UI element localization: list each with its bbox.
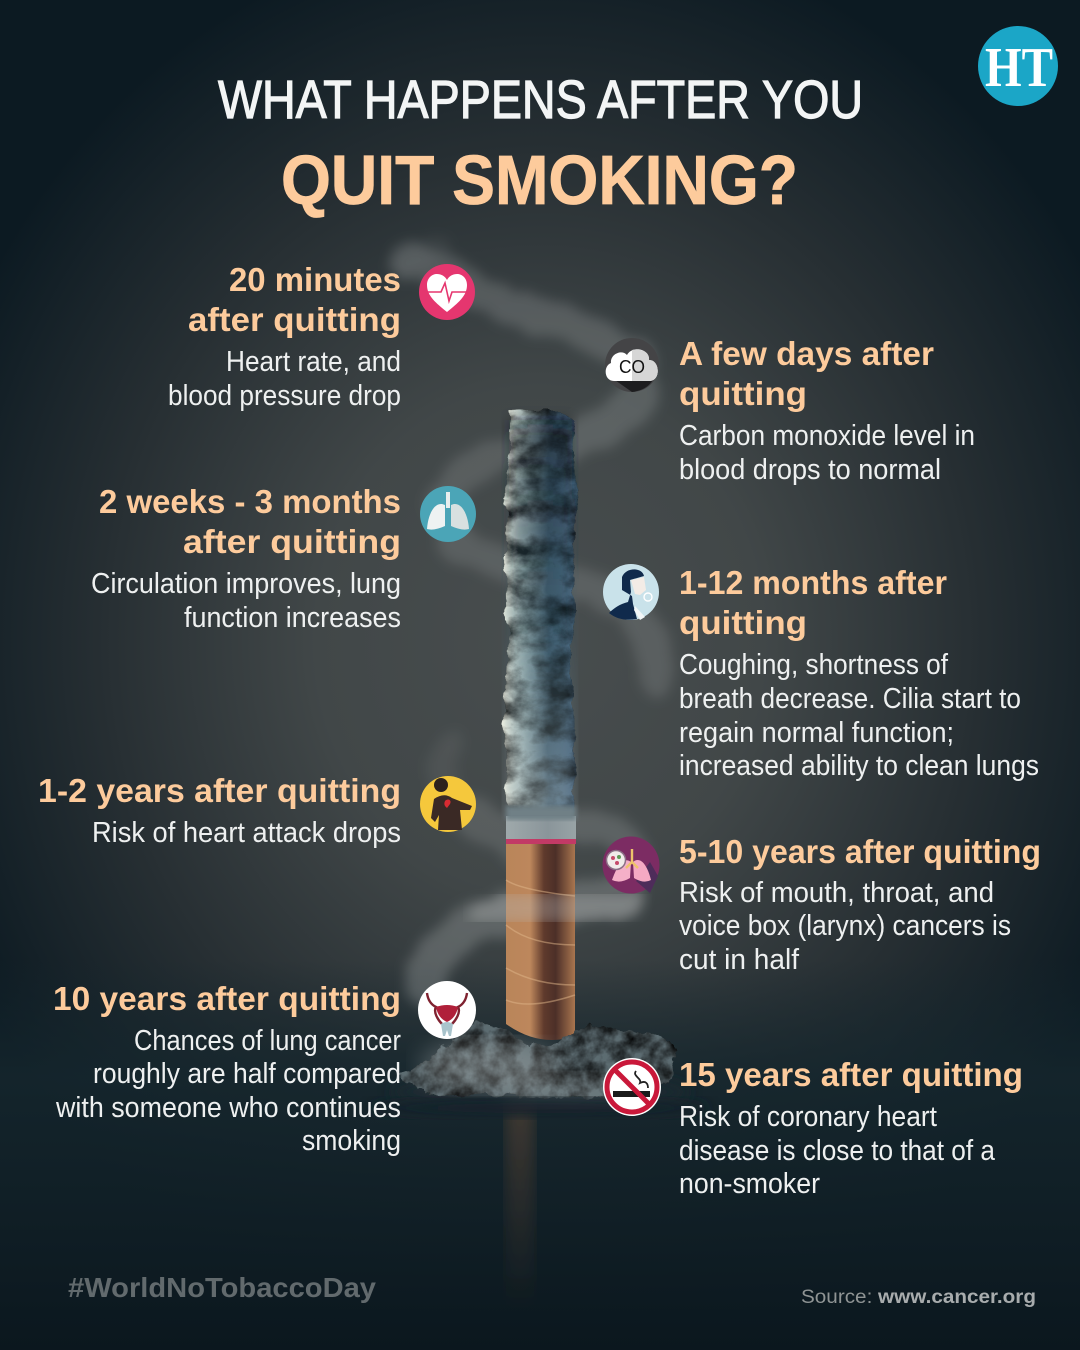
title line 1: WHAT HAPPENS AFTER YOU bbox=[218, 70, 863, 130]
heading: 1-2 years after quitting bbox=[38, 773, 401, 810]
item: 5-10 years bbox=[679, 834, 1041, 976]
icon: no smoking bbox=[603, 1058, 661, 1116]
description: Circulation improves, lung bbox=[91, 568, 401, 600]
description: increased ability to clean lungs bbox=[679, 750, 1039, 782]
description bbox=[679, 1101, 996, 1200]
smoke band over cigarette filter bbox=[490, 898, 625, 918]
heading: 10 years after quitting bbox=[53, 981, 401, 1018]
heading: A few days after bbox=[679, 336, 934, 373]
description: non-smoker bbox=[679, 1168, 820, 1200]
description: Chances of lung cancer bbox=[134, 1025, 401, 1057]
icon: lungs bbox=[420, 486, 476, 542]
description: with someone who continues bbox=[55, 1092, 401, 1124]
description: breath decrease. Cilia start to bbox=[679, 683, 1021, 715]
icon: lung cancer cells bbox=[602, 836, 660, 894]
title line 2: QUIT SMOKING? bbox=[281, 141, 798, 219]
description: Coughing, shortness of bbox=[679, 649, 949, 681]
description: Carbon monoxide level in bbox=[679, 420, 975, 452]
icon: heart attack bbox=[420, 776, 476, 832]
heading bbox=[679, 336, 934, 413]
description: blood pressure drop bbox=[168, 380, 401, 412]
description: voice box (larynx) cancers is bbox=[679, 910, 1011, 942]
description: regain normal function; bbox=[679, 717, 954, 749]
description: disease is close to that of a bbox=[679, 1135, 996, 1167]
smoke trails behind cigarette bbox=[405, 245, 655, 985]
item: 2 weeks bbox=[91, 484, 401, 634]
item: 20 minutes bbox=[168, 262, 401, 412]
icon: CO cloud: CO bbox=[619, 357, 645, 377]
description: blood drops to normal bbox=[679, 454, 941, 486]
description: roughly are half compared bbox=[93, 1058, 401, 1090]
description bbox=[679, 420, 975, 486]
item: 15 years bbox=[679, 1057, 1023, 1200]
title bbox=[218, 70, 863, 219]
icon: coughing person bbox=[603, 564, 659, 620]
heading: 15 years after quitting bbox=[679, 1057, 1023, 1094]
pink ring bbox=[506, 839, 576, 844]
item: 1-12 months bbox=[679, 565, 1039, 782]
description bbox=[55, 1025, 401, 1157]
heading bbox=[99, 484, 401, 561]
description bbox=[91, 568, 401, 634]
description: Risk of coronary heart bbox=[679, 1101, 937, 1133]
heading: 20 minutes bbox=[229, 262, 401, 299]
icon: heart rate bbox=[419, 264, 475, 320]
icon: CO cloud bbox=[605, 338, 659, 392]
item: few days bbox=[679, 336, 975, 486]
description bbox=[679, 649, 1039, 782]
heading: after quitting bbox=[183, 524, 401, 561]
description: smoking bbox=[302, 1125, 401, 1157]
white filter band bbox=[506, 816, 576, 840]
heading bbox=[188, 262, 401, 339]
description bbox=[168, 346, 401, 412]
heading: 5-10 years after quitting bbox=[679, 834, 1041, 871]
description: cut in half bbox=[679, 944, 800, 976]
description: Risk of mouth, throat, and bbox=[679, 877, 994, 909]
description bbox=[679, 877, 1011, 976]
description: Risk of heart attack drops bbox=[92, 817, 401, 849]
logo: HT: HT bbox=[985, 37, 1053, 99]
heading: 2 weeks - 3 months bbox=[99, 484, 401, 521]
description: function increases bbox=[184, 602, 401, 634]
cork filter bbox=[506, 844, 575, 1040]
ash column bbox=[503, 408, 579, 812]
ash pile bbox=[370, 1021, 710, 1118]
heading: quitting bbox=[679, 605, 807, 642]
icon: bladder and prostate bbox=[418, 981, 476, 1039]
description: Heart rate, and bbox=[226, 346, 401, 378]
heading: 1-12 months after bbox=[679, 565, 947, 602]
item: 1-2 years bbox=[38, 773, 401, 849]
cigarette reflection bbox=[506, 1100, 534, 1310]
item: 10 years bbox=[53, 981, 401, 1157]
source: Source: www.cancer.org bbox=[801, 1287, 1036, 1308]
heading: after quitting bbox=[188, 302, 401, 339]
cigarette bbox=[503, 408, 579, 1040]
heading: quitting bbox=[679, 376, 807, 413]
logo: HT bbox=[978, 26, 1058, 106]
heading bbox=[679, 565, 947, 642]
hashtag: #WorldNoTobaccoDay bbox=[68, 1272, 376, 1303]
